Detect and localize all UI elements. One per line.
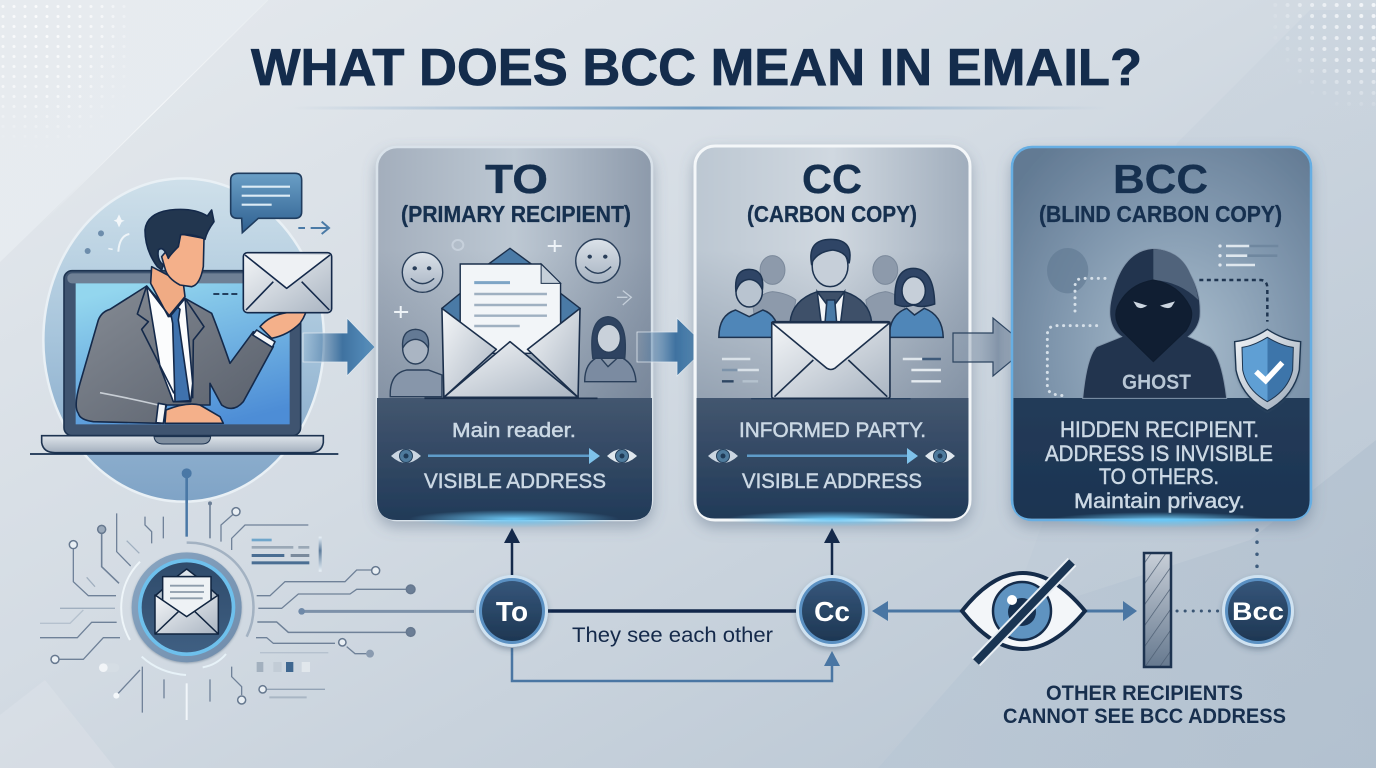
caption: other recipients: CANNOT SEE BCC ADDRESS [1003,705,1286,728]
dashed path [1199,280,1267,322]
panel: Cc [695,146,970,527]
smiley left [402,252,443,292]
caption: other recipients [1003,682,1286,728]
businessman [76,209,308,423]
blurred silhouette [1047,248,1088,293]
ghost label: GHOST [1122,371,1191,394]
heading [747,156,917,227]
envelope back [442,248,580,327]
description: ADDRESS IS INVISIBLE [1045,441,1273,466]
node: Cc: Cc [814,596,850,627]
caption: other recipients: OTHER RECIPIENTS [1046,682,1243,705]
visibility indicator [391,448,637,464]
dotted link Bcc panel to node [1255,530,1259,570]
card [1012,147,1311,520]
right person [889,268,943,337]
hub circle [121,543,254,675]
illustration: people behind envelope [719,239,943,399]
sparkles [85,214,129,254]
node: Bcc: Bcc [1232,598,1284,626]
description: TO OTHERS. [1099,464,1219,489]
connector dot [182,468,192,503]
circuit nodes [51,501,415,704]
person left [390,329,442,397]
panel: To [377,147,652,528]
laptop [30,271,338,454]
node: To: To [496,596,528,627]
description: Maintain privacy. [1074,490,1245,513]
description: HIDDEN RECIPIENT. [1060,417,1259,442]
illustration: hooded ghost [1047,244,1301,411]
description: INFORMED PARTY. [739,419,926,442]
email icon [155,569,218,634]
node: Bcc [1222,575,1294,647]
shield [1235,329,1301,411]
title: WHAT DOES BCC MEAN IN EMAIL? [251,39,1142,97]
Cc connector arrow [824,528,840,576]
description [1045,417,1273,513]
heading [1039,156,1282,227]
side list lines [722,359,941,381]
card [695,146,970,520]
list lines [1218,244,1278,267]
speech bubble [231,173,302,233]
left person [719,269,779,337]
backdrop circle [43,178,324,502]
arrows from crossed eye [872,601,1137,621]
heading: (CARBON COPY) [747,201,917,227]
small send arrow [298,222,329,234]
circuit traces [40,473,474,720]
status bars [99,537,322,672]
visibility indicator [708,448,955,464]
To-Cc link line [548,609,797,613]
heading: (BLIND CARBON COPY) [1039,201,1282,227]
envelope [772,322,890,398]
dotted link barrier to Bcc [1177,610,1221,612]
node: To [476,575,548,647]
label: VISIBLE ADDRESS [424,470,606,493]
arrow: Cc to Bcc [953,318,1028,376]
icon: crossed-out eye [962,562,1085,662]
hood figure [1083,248,1227,398]
caption: they see each other: They see each other [572,624,773,647]
heading: CC [802,156,862,202]
letter [460,264,561,353]
barrier [1144,553,1171,667]
To connector arrow [504,528,520,576]
heading: (PRIMARY RECIPIENT) [401,201,631,227]
center person [790,239,872,323]
panel: Bcc [1012,147,1311,528]
illustration: open envelope and recipients [390,239,636,398]
arrow: To to Cc [637,318,707,376]
envelope front [424,308,598,398]
person right [585,317,636,382]
smiley right [576,239,620,283]
circuit hub with email icon [40,473,474,720]
background people [753,256,905,322]
card [377,147,652,520]
floor line [751,398,911,400]
heading: TO [485,156,548,202]
heading: BCC [1113,156,1208,202]
dotted paths [1047,278,1105,396]
lower bracket arrow [512,648,840,681]
heading [401,156,631,227]
arrow: sender to To [303,318,375,376]
node: Cc [796,575,868,647]
sparkle marks [394,240,631,318]
label: VISIBLE ADDRESS [742,470,922,493]
illustration: sender at laptop [30,173,338,503]
description: Main reader. [452,420,576,442]
envelope in hand [243,253,332,313]
